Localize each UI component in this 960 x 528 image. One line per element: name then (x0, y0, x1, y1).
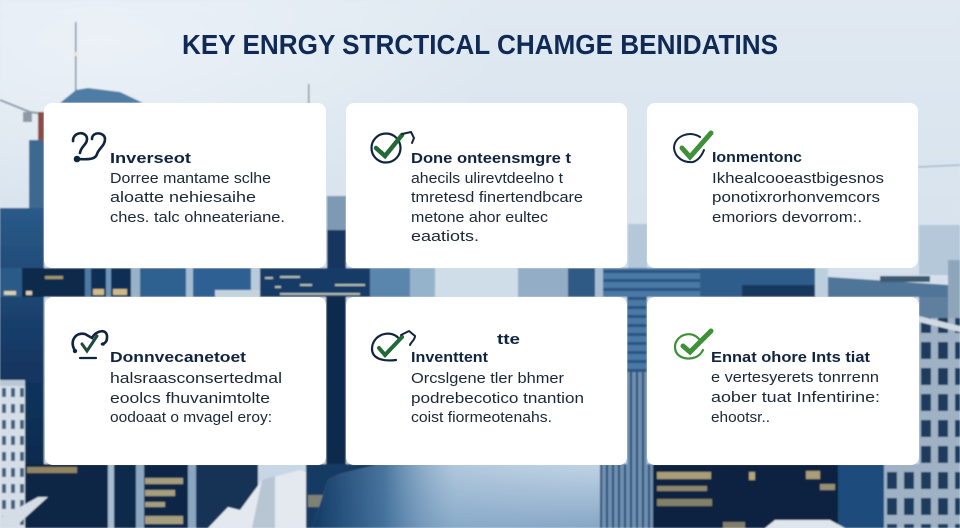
body text (712, 171, 884, 226)
heading: Done onteensmgre t (411, 150, 571, 167)
panel: card 4 (45, 297, 326, 465)
body text (110, 171, 285, 226)
body text: Dorree mantame sclhe (110, 171, 271, 187)
heading: Ennat ohore Ints tiat (711, 349, 870, 366)
body text: e vertesyerets tonrrenn (711, 370, 879, 386)
icon: green check in circle (372, 132, 414, 162)
body text (411, 371, 584, 426)
body text: aloatte nehiesaihe (110, 190, 256, 206)
white building, lower left (0, 380, 25, 528)
body text: halsraasconsertedmal (110, 371, 282, 387)
street-level towers, left (0, 464, 380, 528)
body text: podrebecotico tnantion (411, 391, 584, 407)
panel: card 5 (346, 297, 627, 465)
antenna tower and rooftop (60, 22, 310, 104)
heading: Inventtent (411, 349, 488, 366)
body text: oodoaat o mvagel eroy: (110, 410, 272, 426)
heading: Ionmentonc (712, 149, 802, 166)
floating heading fragment: tte (497, 331, 520, 348)
river (312, 464, 600, 528)
body text: eoolcs fhuvanimtolte (110, 391, 270, 407)
body text: coist fiormeotenahs. (411, 410, 552, 426)
icon: green check in open circle (372, 331, 415, 360)
body text: aober tuat Infentirine: (711, 390, 880, 406)
icon: check with question mark (73, 331, 107, 358)
body text: ponotixrorhonvemcors (712, 190, 880, 206)
panel: card 2 (346, 103, 627, 268)
body text: metone ahor eultec (411, 210, 548, 226)
body text: ahecils ulirevtdeelno t (411, 171, 563, 187)
body text (110, 371, 282, 426)
heading: Donnvecanetoet (110, 349, 246, 366)
right-side tower (919, 297, 960, 528)
mid-level buildings between rows (0, 260, 960, 465)
body text: eaatiots. (411, 229, 479, 245)
panel: card 1 (44, 103, 326, 268)
panel: card 3 (647, 103, 918, 268)
body text: ches. talc ohneateriane. (110, 210, 285, 226)
body text: tmretesd finertendbcare (411, 190, 583, 206)
body text: ehootsr.. (711, 410, 770, 426)
body text (411, 171, 583, 245)
body text: Ikhealcooeastbigesnos (712, 171, 884, 187)
street-level towers, right (600, 464, 960, 528)
body text: emoriors devorrom:. (712, 210, 862, 226)
panel: card 6 (647, 297, 919, 465)
icon: question marks with connector (73, 133, 105, 161)
icon: green check with green ring (675, 331, 711, 359)
heading: Inverseot (110, 150, 191, 167)
body text: Orcslgene tler bhmer (411, 371, 564, 387)
body text (711, 370, 880, 426)
title: KEY ENRGY STRCTICAL CHAMGE BENIDATINS (182, 29, 778, 60)
crane (0, 100, 44, 140)
icon: green check with swoosh (674, 133, 711, 162)
